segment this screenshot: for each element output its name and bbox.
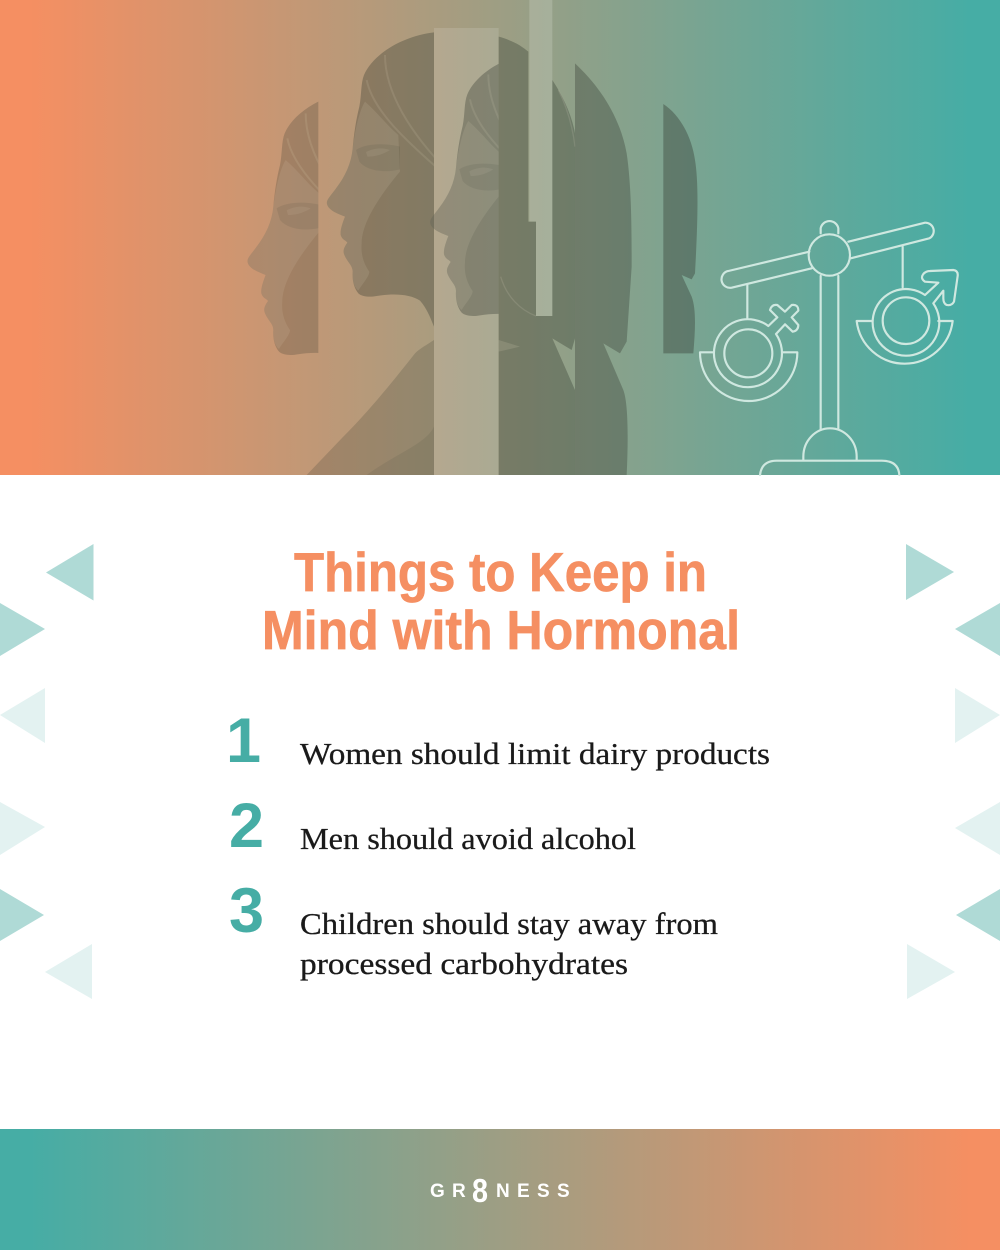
profile: hair strip: [575, 63, 632, 475]
logo wordmark: G: [430, 1181, 445, 1202]
list item 1: 1: [226, 706, 261, 776]
title: Things to Keep in: [294, 541, 707, 603]
decorative triangles: left column: [0, 544, 94, 999]
female symbol: [700, 285, 798, 401]
profile: far right strip: [663, 104, 697, 353]
list item 3: processed carbohydrates: [300, 946, 628, 981]
scale post and base: [760, 276, 899, 475]
list item 3: 3: [229, 876, 264, 946]
logo wordmark: N: [496, 1181, 510, 1202]
light vertical strip: upper: [529, 0, 552, 316]
footer band: [0, 1129, 1000, 1250]
list item 2: [229, 791, 636, 861]
panel: hero banner: [0, 0, 1000, 475]
list item 1: Women should limit dairy products: [300, 736, 770, 771]
title: [262, 541, 740, 661]
light vertical strip: centre: [434, 28, 499, 475]
illustration: layered female profiles: [248, 0, 697, 475]
logo wordmark: 8: [472, 1172, 488, 1209]
icon: gender balance scale: [700, 221, 958, 475]
profile: centre face and shoulder: [307, 20, 443, 475]
logo wordmark: S: [537, 1181, 550, 1202]
profile: left face: [248, 102, 318, 355]
profile: right head and body: [499, 37, 575, 475]
male symbol: [857, 247, 958, 364]
list item 1: [226, 706, 770, 776]
list item 2: 2: [229, 791, 264, 861]
scale pivot: [809, 221, 850, 276]
logo wordmark: [430, 1172, 570, 1209]
decorative triangles: right column: [906, 544, 1000, 999]
logo wordmark: S: [557, 1181, 570, 1202]
scale beam: [722, 223, 934, 288]
logo wordmark: E: [517, 1181, 530, 1202]
list item 3: [229, 876, 718, 981]
list item 3: Children should stay away from: [300, 906, 718, 941]
title: Mind with Hormonal: [262, 599, 740, 661]
logo wordmark: R: [452, 1181, 466, 1202]
list item 2: Men should avoid alcohol: [300, 821, 636, 856]
profile: right face over strip: [430, 64, 499, 316]
